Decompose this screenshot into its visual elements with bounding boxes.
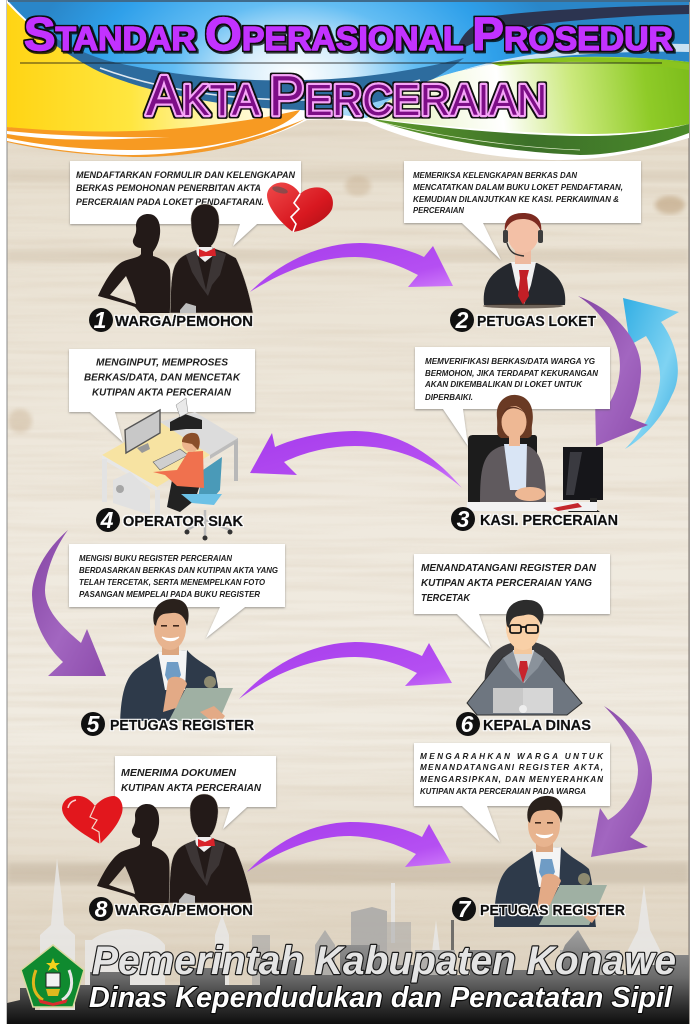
step 5 number badge: 5: [87, 711, 101, 737]
step 2 number badge: 2: [455, 307, 469, 333]
step 6 speech bubble: TERCETAK: [421, 593, 471, 604]
step 6 speech bubble: MENANDATANGANI REGISTER DAN: [421, 563, 597, 574]
step 2 panel: [404, 161, 641, 333]
step 2 speech bubble: [404, 161, 641, 260]
step 3 label: KASI. PERCERAIAN: [480, 513, 618, 529]
step 4 speech bubble: MENGINPUT, MEMPROSES: [96, 358, 228, 368]
arrow: kasi to operator: [250, 431, 462, 488]
step 5 speech bubble: BERDASARKAN BERKAS DAN KUTIPAN AKTA YANG: [79, 565, 278, 575]
arrow: operator to register: [32, 530, 106, 676]
step 4 number badge: 4: [100, 507, 114, 533]
step 6 speech bubble: KUTIPAN AKTA PERCERAIAN YANG: [421, 578, 592, 589]
step 7 speech bubble: MENGARSIPKAN, DAN MENYERAHKAN: [420, 775, 604, 784]
arrow: warga to loket: [250, 243, 453, 292]
step 1 label: WARGA/PEMOHON: [115, 314, 253, 330]
arrow: kepala dinas to petugas register: [591, 706, 652, 857]
step 3 panel: [415, 347, 618, 532]
step 1 panel: [70, 161, 333, 333]
step 7 speech bubble: [414, 743, 610, 842]
step 3 speech bubble: [415, 347, 610, 446]
city skyline: [7, 858, 689, 1024]
step 1 speech bubble: PERCERAIAN PADA LOKET PENDAFTARAN.: [76, 197, 264, 208]
step 6 label: KEPALA DINAS: [483, 718, 591, 734]
footer heading: department name: Dinas Kependudukan dan Pencatatan Sipil: [89, 982, 673, 1014]
title: STANDAR OPERASIONAL PROSEDUR: [24, 8, 673, 60]
step 1 speech bubble: MENDAFTARKAN FORMULIR DAN KELENGKAPAN: [76, 170, 296, 181]
subtitle: AKTA PERCERAIAN: [146, 64, 547, 128]
step 7 speech bubble: MENGARAHKAN WARGA UNTUK: [420, 752, 604, 761]
step 8 speech bubble: KUTIPAN AKTA PERCERAIAN: [121, 783, 262, 794]
step 5 speech bubble: MENGISI BUKU REGISTER PERCERAIAN: [79, 553, 233, 563]
figure: counter officer with headset: [483, 213, 565, 308]
header swirl banner: [7, 0, 690, 160]
step 5 label: PETUGAS REGISTER: [110, 718, 255, 734]
step 5 speech bubble: [69, 544, 285, 638]
figure: operator at computer desk: [102, 398, 238, 540]
step 4 speech bubble: BERKAS/DATA, DAN MENCETAK: [84, 372, 241, 384]
couple silhouette: [98, 204, 253, 313]
step 6 number badge: 6: [461, 711, 474, 737]
step 4 speech bubble: [69, 349, 255, 442]
step 6 panel: [414, 554, 610, 737]
step 7 label: PETUGAS REGISTER: [480, 903, 626, 919]
step 8 speech bubble: [115, 756, 276, 829]
step 2 number badge: [450, 307, 474, 333]
step 1 number badge: [89, 307, 113, 333]
step 8 panel: [62, 756, 276, 922]
step 3 number badge: 3: [457, 506, 470, 532]
step 2 speech bubble: MEMERIKSA KELENGKAPAN BERKAS DAN: [413, 170, 578, 180]
step 7 speech bubble: MENANDATANGANI REGISTER AKTA,: [420, 763, 603, 772]
couple silhouette: [97, 794, 252, 903]
step 2 speech bubble: KEMUDIAN DILANJUTKAN KE KASI. PERKAWINAN &: [413, 194, 619, 204]
arrow: blue return from Kasi to Loket: [623, 298, 679, 449]
step 5 speech bubble: PASANGAN MEMPELAI PADA BUKU REGISTER: [79, 589, 260, 599]
step 3 speech bubble: AKAN DIKEMBALIKAN DI LOKET UNTUK: [424, 380, 583, 389]
step 8 number badge: 8: [95, 896, 108, 922]
step 7 number badge: [452, 896, 476, 922]
step 8 speech bubble: MENERIMA DOKUMEN: [121, 768, 237, 779]
step 3 speech bubble: MEMVERIFIKASI BERKAS/DATA WARGA YG: [425, 357, 595, 366]
step 1 speech bubble: [70, 161, 301, 246]
step 7 number badge: 7: [458, 896, 472, 922]
step 5 number badge: [81, 711, 105, 737]
step 4 panel: [69, 349, 255, 540]
step 5 panel: [69, 544, 285, 737]
arrow: loket to kasi: [578, 296, 648, 446]
step 4 speech bubble: KUTIPAN AKTA PERCERAIAN: [92, 388, 232, 398]
step 4 number badge: [96, 507, 120, 533]
figure: register officer: [120, 599, 233, 730]
step 2 speech bubble: PERCERAIAN: [413, 205, 465, 215]
step 5 speech bubble: TELAH TERCETAK, SERTA MENEMPELKAN FOTO: [79, 577, 265, 587]
step 7 speech bubble: KUTIPAN AKTA PERCERAIAN PADA WARGA: [420, 787, 586, 796]
figure: head of agency with laptop: [467, 600, 582, 715]
step 6 speech bubble: [414, 554, 610, 648]
icon: broken heart: [62, 796, 123, 844]
step 3 speech bubble: BERMOHON, JIKA TERDAPAT KEKURANGAN: [425, 369, 598, 378]
arrow: petugas register to warga: [247, 822, 451, 872]
step 1 speech bubble: BERKAS PEMOHONAN PENERBITAN AKTA: [76, 183, 261, 194]
arrow: register to kepala dinas: [239, 642, 452, 699]
step 8 label: WARGA/PEMOHON: [115, 903, 253, 919]
icon: broken heart: [267, 182, 333, 232]
step 3 speech bubble: DIPERBAIKI.: [425, 393, 473, 402]
step 2 speech bubble: MENCATATKAN DALAM BUKU LOKET PENDAFTARAN,: [413, 182, 623, 192]
step 7 panel: [414, 743, 626, 927]
footer heading: government name: Pemerintah Kabupaten Konawe: [92, 939, 676, 983]
step 4 label: OPERATOR SIAK: [123, 514, 244, 530]
figure: section head at desk: [467, 395, 603, 512]
step 6 number badge: [456, 711, 480, 737]
figure: register officer: [494, 796, 607, 927]
step 8 number badge: [89, 896, 113, 922]
step 3 number badge: [451, 506, 475, 532]
logo: Kabupaten Konawe emblem: [21, 945, 84, 1007]
step 2 label: PETUGAS LOKET: [477, 314, 596, 330]
step 1 number badge: 1: [94, 307, 106, 333]
